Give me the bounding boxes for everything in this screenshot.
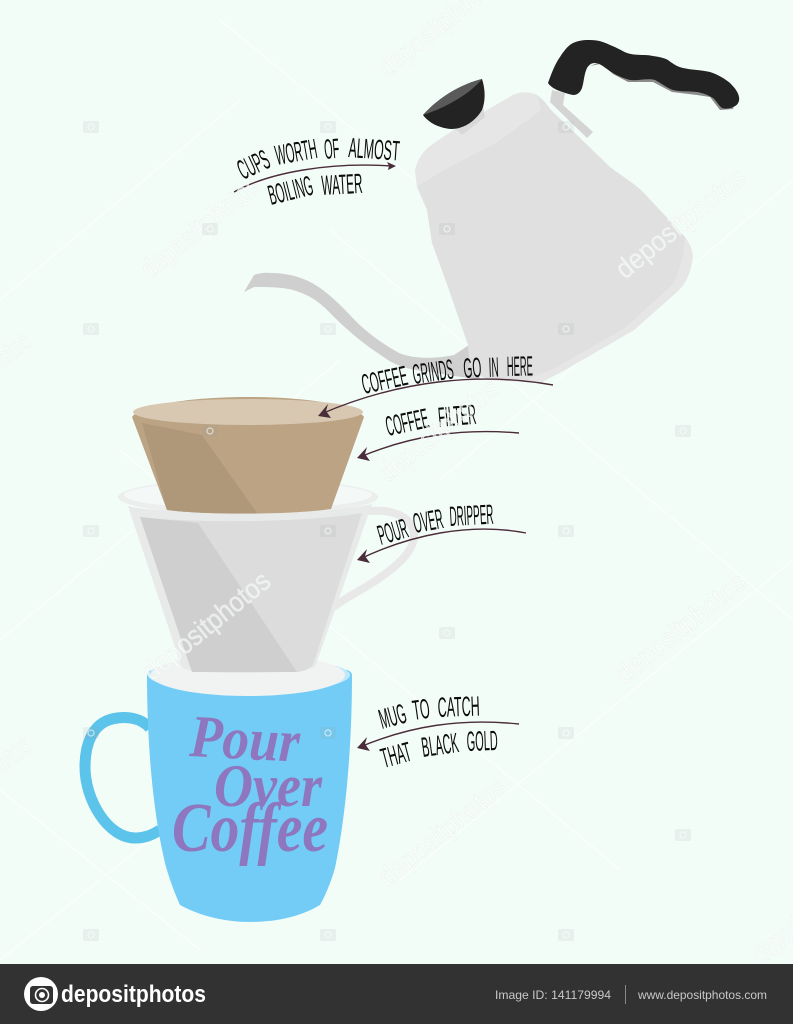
label: boiling water: CUPS: [232, 144, 275, 185]
label: coffee grinds: IN: [488, 352, 499, 383]
label: coffee filter: COFFEE: [383, 403, 431, 442]
label: pour over dripper: OVER: [411, 503, 446, 539]
label: pour over dripper: POUR: [374, 513, 411, 551]
dripper cup front: [140, 513, 362, 672]
label: boiling water: WATER: [321, 168, 363, 201]
watermarks: depositphotos: [136, 565, 276, 687]
kettle lid band: [415, 92, 541, 187]
label: mug: [376, 691, 498, 774]
mug lettering: Coffee: [172, 790, 328, 867]
kettle base highlight: [528, 237, 693, 383]
pour over dripper: [118, 479, 414, 673]
label: coffee grinds: GRINDS: [411, 354, 455, 390]
annotation labels: DRIPPER: [449, 499, 494, 532]
arrow: dripper: [357, 529, 526, 563]
kettle handle shadow: [590, 60, 736, 110]
filter opening: [133, 399, 363, 425]
mug handle: [85, 718, 160, 838]
kettle lid knob stem: [455, 105, 485, 135]
label: mug: CATCH: [437, 691, 480, 723]
annotation labels: ALMOST: [348, 132, 401, 167]
dripper rim inner: [124, 481, 372, 509]
kettle lid knob: [423, 79, 485, 129]
watermarks: depositphotos: [609, 161, 752, 285]
mug opening highlight: [148, 657, 350, 693]
kettle handle: [548, 40, 739, 109]
watermarks: depositphotos: [609, 566, 752, 690]
watermarks: depositphotos: [372, 771, 512, 893]
label: mug: BLACK: [420, 727, 461, 763]
footer url: www.depositphotos.com: [637, 988, 767, 1002]
filter shaded fold: [142, 423, 257, 513]
footer bar: [0, 964, 793, 1024]
mug lettering: Pour: [187, 703, 302, 775]
mug lettering: Over: [214, 753, 323, 819]
label: boiling water: WORTH: [273, 133, 319, 171]
mug: [85, 654, 352, 922]
dripper rim: [118, 479, 378, 515]
filter body: [132, 397, 364, 514]
dripper cup shadow: [140, 517, 297, 672]
label: coffee grinds: GO: [462, 352, 482, 384]
watermarks: depositphotos: [134, 169, 266, 285]
annotation labels: GOLD: [466, 725, 498, 757]
footer image id: Image ID: 141179994: [495, 988, 611, 1002]
label: coffee grinds: COFFEE: [359, 360, 410, 400]
label: coffee grinds: [359, 351, 533, 400]
kettle: [244, 40, 739, 383]
watermarks: depositphotos: [372, 372, 504, 488]
arrow: coffee filter: [357, 432, 519, 461]
label: mug: TO: [411, 693, 432, 726]
arrow: boiling water: [234, 162, 396, 192]
label: boiling water: BOILING: [265, 170, 316, 211]
label: coffee filter: [383, 399, 477, 442]
label: boiling water: [232, 132, 401, 211]
mug saucer rim: [151, 654, 345, 696]
dripper handle: [332, 511, 414, 608]
annotation arrows: [234, 162, 553, 751]
kettle spout: [244, 273, 480, 380]
icon: depositphotos camera logo: [24, 977, 58, 1011]
kettle handle bracket: [550, 90, 593, 138]
label: boiling water: OF: [323, 133, 340, 165]
label: mug: THAT: [378, 736, 415, 774]
label: mug: MUG: [376, 698, 410, 735]
kettle body: [415, 92, 693, 383]
text: HERE: [507, 351, 533, 382]
footer logo text: depositphotos: [61, 981, 206, 1008]
kettle lid knob shine: [423, 79, 482, 115]
mug lettering: [172, 703, 328, 867]
dripper cup: [128, 504, 372, 673]
watermark camera icons: [83, 121, 691, 941]
arrow: coffee grinds: [318, 379, 553, 418]
coffee filter: [132, 397, 364, 514]
annotation labels: FILTER: [437, 399, 477, 433]
annotation labels: [232, 132, 533, 774]
mug body: [147, 670, 352, 922]
arrow: mug: [357, 722, 519, 751]
